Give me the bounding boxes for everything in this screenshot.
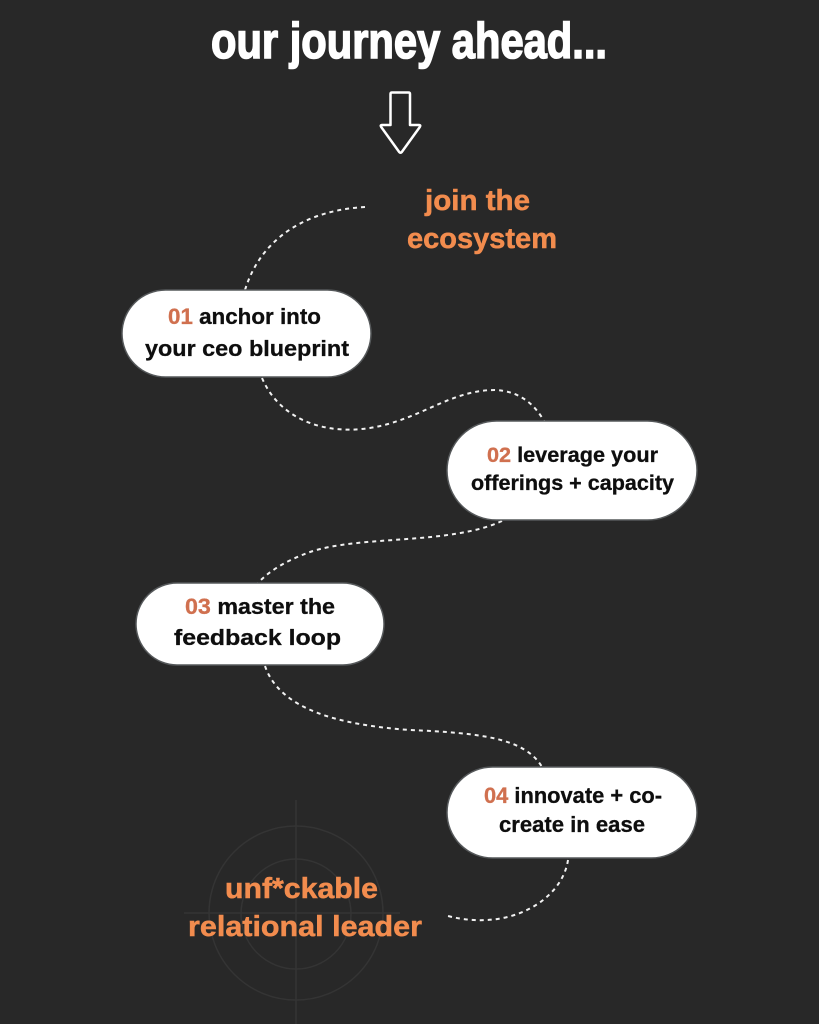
step 01 pill	[122, 290, 371, 377]
dotted path: ecosystem to step 01	[245, 207, 365, 290]
heading: join the ecosystem	[407, 185, 557, 255]
dotted path: step 01 to step 02	[262, 378, 544, 430]
icon: down arrow	[381, 92, 420, 153]
step 03 pill: 03 master the	[185, 594, 335, 619]
heading: unf*ckable relational leader: relational leader	[188, 911, 422, 943]
dotted path: step 04 to leader	[448, 860, 568, 920]
step 02 pill: offerings + capacity	[471, 472, 674, 495]
step 03 pill	[136, 583, 384, 665]
heading: join the ecosystem: ecosystem	[407, 223, 557, 255]
title: our journey ahead...	[211, 13, 607, 69]
target watermark	[184, 800, 400, 1024]
heading: unf*ckable relational leader	[188, 873, 422, 943]
step 01 pill: 01 anchor into	[168, 304, 321, 329]
step 01 pill: your ceo blueprint	[145, 336, 350, 361]
step 02 pill	[447, 421, 697, 520]
heading: unf*ckable relational leader: unf*ckable	[225, 873, 378, 905]
dotted path: step 02 to step 03	[258, 521, 502, 583]
step 04 pill: create in ease	[499, 812, 645, 837]
step 04 pill: 04 innovate + co-	[484, 783, 662, 808]
step 02 pill: 02 leverage your	[487, 444, 658, 467]
heading: join the ecosystem: join the	[424, 185, 530, 217]
dotted path: step 03 to step 04	[265, 666, 542, 767]
step 03 pill: feedback loop	[174, 625, 341, 650]
step 04 pill	[447, 767, 697, 858]
